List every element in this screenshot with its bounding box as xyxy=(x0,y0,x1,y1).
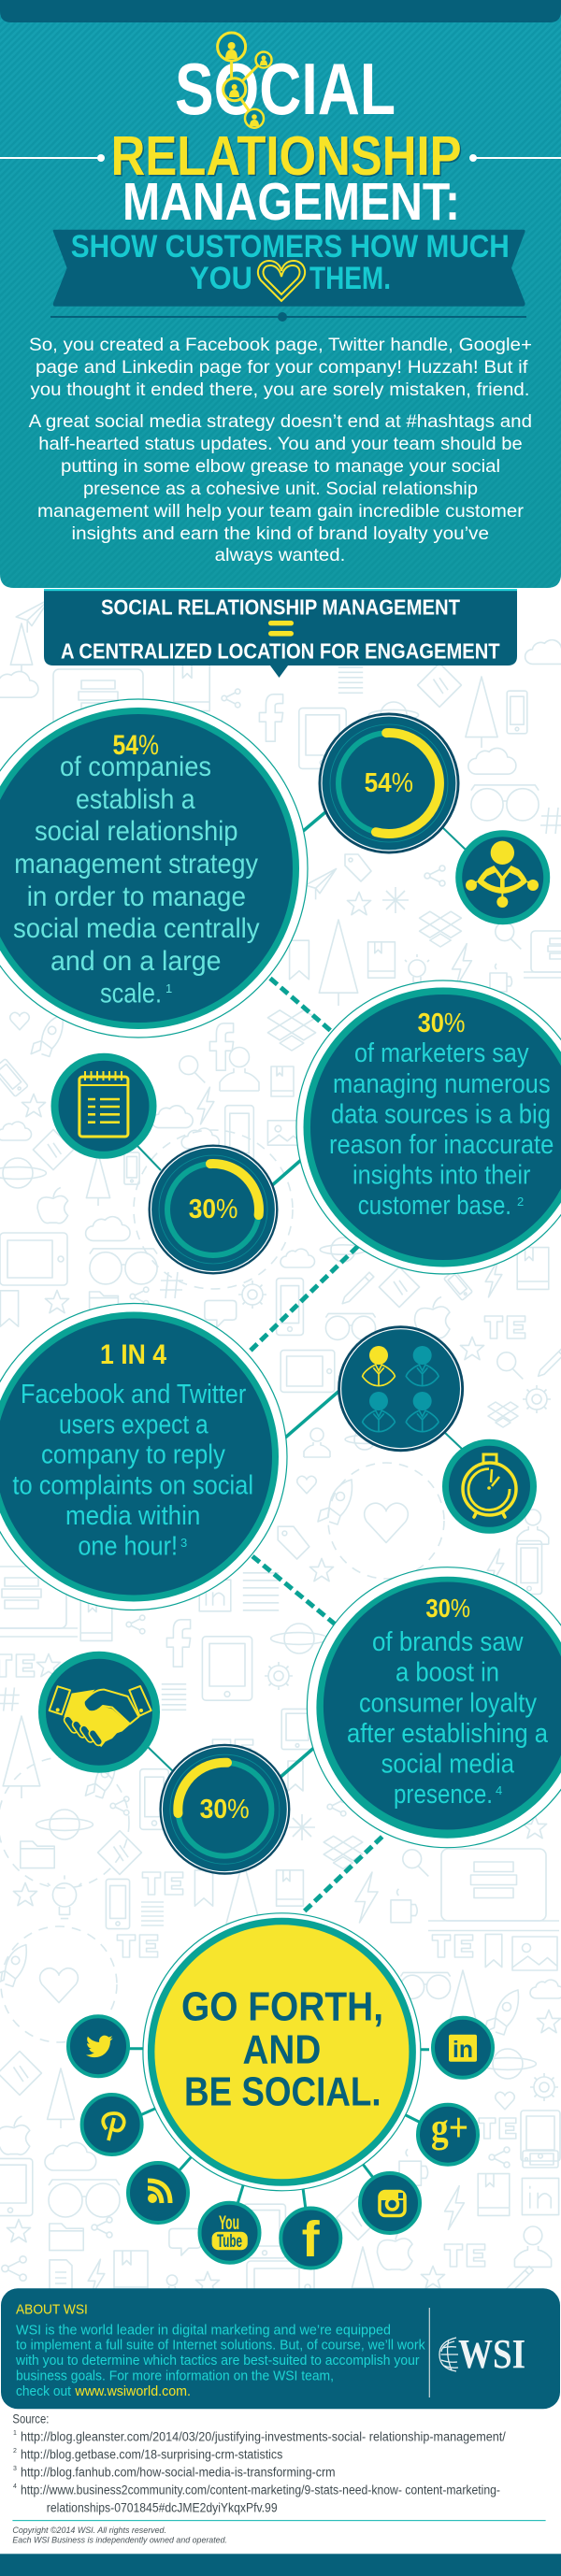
panel: closing call to action: GO FORTH, xyxy=(181,1984,383,2030)
text: intro paragraph two: insights and earn the kind of brand loyalty you’ve xyxy=(71,523,489,544)
panel: stat 54 percent: 54% xyxy=(112,730,159,761)
panel: closing call to action: AND xyxy=(243,2026,321,2072)
ribbon: subtitle xyxy=(53,229,525,307)
icon: notepad xyxy=(54,1057,153,1155)
chart: 54 percent dial xyxy=(318,712,460,854)
text: sources: relationships-0701845#dcJME2dyiYkqxPfv.99 xyxy=(47,2501,278,2515)
panel: header introduction xyxy=(0,0,561,588)
text: sources: http://blog.getbase.com/18-surprising-crm-statistics xyxy=(21,2448,283,2462)
connector: dial to stat four xyxy=(280,1746,316,1778)
logo: WSI: WSI xyxy=(458,2331,525,2377)
text: intro paragraph one: So, you created a Facebook page, Twitter handle, Google+ xyxy=(29,335,532,355)
panel: stat 30 percent of marketers: 2 xyxy=(517,1195,524,1209)
chart: 30 percent dial one: 30% xyxy=(189,1195,237,1224)
panel: stat 54 percent: social relationship xyxy=(35,816,237,847)
side rule left xyxy=(0,154,105,162)
icon: google plus: g+ xyxy=(431,2105,468,2151)
panel: stat 1 in 4: company to reply xyxy=(41,1440,226,1470)
panel: about WSI xyxy=(1,2288,560,2409)
connectors: social icons to closing circle xyxy=(127,2049,429,2210)
panel: stat 30 percent of brands: of brands saw xyxy=(372,1627,524,1657)
panel: stat 54 percent: in order to manage xyxy=(27,881,246,912)
connector: handshake to dial xyxy=(147,1746,174,1772)
dashed arrow: stat two to stat three xyxy=(249,1246,358,1352)
icon: google plus xyxy=(418,2105,478,2165)
text: sources: http://blog.fanhub.com/how-social-media-is-transforming-crm xyxy=(21,2466,336,2480)
panel: stat 30 percent of brands xyxy=(307,1567,561,1848)
panel: about WSI: with you to determine which tactics are best-suited to accomplish your xyxy=(15,2353,419,2368)
panel: stat 54 percent: establish a xyxy=(76,784,195,815)
connector: dial to icon xyxy=(441,826,467,851)
connector: stat three to dial xyxy=(284,1390,340,1438)
panel: stat 1 in 4: Facebook and Twitter xyxy=(21,1380,247,1410)
panel: about WSI: WSI is the world leader in digital marketing and we’re equipped xyxy=(16,2322,391,2338)
text: intro paragraph two: A great social media strategy doesn’t end at #hashtags and xyxy=(29,411,532,432)
panel: stat 30 percent of marketers: of marketers say xyxy=(354,1038,529,1068)
panel: stat 1 in 4: users expect a xyxy=(59,1410,209,1439)
icon: heart xyxy=(258,261,305,301)
panel: about WSI: www.wsiworld.com. xyxy=(74,2383,191,2399)
chart: 30 percent dial two: 30% xyxy=(200,1795,250,1825)
dashed arrow: stat four to closing circle xyxy=(304,1837,382,1911)
banner: centralized location: A CENTRALIZED LOCATION FOR ENGAGEMENT xyxy=(61,639,500,664)
icon: pinterest xyxy=(82,2095,142,2154)
text: sources: http://blog.gleanster.com/2014/03/20/justifying-investments-social- relationship-management/ xyxy=(21,2430,506,2444)
text: sources: 1 xyxy=(13,2430,17,2437)
icon: linkedin xyxy=(433,2018,493,2078)
text: intro paragraph two: management will help your team gain incredible customer xyxy=(37,501,525,522)
text: intro paragraph two: presence as a cohesive unit. Social relationship xyxy=(83,479,478,499)
icon: youtube: Tube xyxy=(217,2232,242,2252)
panel: stat 54 percent: 1 xyxy=(165,981,172,995)
chart: 30 percent dial two xyxy=(159,1744,290,1875)
panel: about WSI: business goals. For more information on the WSI team, xyxy=(16,2368,334,2384)
panel: stat 30 percent of brands: 4 xyxy=(496,1783,502,1797)
icon: facebook: f xyxy=(302,2211,321,2268)
chart: 30 percent dial one xyxy=(148,1144,279,1275)
panel: stat 1 in 4: media within xyxy=(65,1501,200,1531)
icon: linkedin: in xyxy=(453,2037,473,2063)
connector: dial to stat two xyxy=(271,1160,301,1186)
text: sources xyxy=(12,2412,506,2515)
text: intro paragraph two: half-hearted status updates. You and your team should be xyxy=(38,434,523,454)
icon: facebook xyxy=(280,2208,340,2268)
logo: WSI xyxy=(439,2331,525,2377)
icon: rss xyxy=(128,2163,188,2223)
icon: four people dial xyxy=(338,1325,464,1452)
panel: stat 30 percent of marketers xyxy=(296,980,561,1274)
panel: stat 30 percent of marketers: 30% xyxy=(418,1009,466,1038)
connector: stat one to dial xyxy=(301,812,325,833)
bottom bar xyxy=(0,2554,561,2576)
panel: about WSI: to implement a full suite of Internet solutions. But, of course, we’ll work xyxy=(16,2338,425,2354)
title: Relationship: RELATIONSHIP xyxy=(112,127,463,189)
icon: youtube: You xyxy=(219,2212,239,2234)
panel: stat 54 percent: and on a large xyxy=(50,946,221,977)
connector: dial to clock xyxy=(444,1432,463,1450)
panel: stat 54 percent: scale. xyxy=(100,979,162,1009)
panel: stat 30 percent of brands: 30% xyxy=(425,1594,470,1623)
icon: instagram xyxy=(360,2173,420,2233)
panel: closing call to action: BE SOCIAL. xyxy=(184,2069,381,2115)
text: intro paragraph two: putting in some elbow grease to manage your social xyxy=(61,456,500,477)
panel: stat 1 in 4: 3 xyxy=(180,1536,187,1550)
panel: about WSI: check out xyxy=(16,2383,72,2399)
text: sources: 2 xyxy=(13,2448,17,2454)
title: Social: SOCIAL xyxy=(175,48,396,130)
dashed arrow: stat one to stat two xyxy=(270,979,331,1031)
text: copyright xyxy=(12,2526,227,2546)
text: sources: 3 xyxy=(13,2466,17,2472)
icon: connected person xyxy=(459,834,547,922)
text: sources: 4 xyxy=(13,2483,17,2490)
text: sources: Source: xyxy=(12,2412,49,2426)
icon: equals sign xyxy=(268,621,294,637)
text: intro paragraph two xyxy=(29,411,532,565)
side rule right xyxy=(469,154,561,162)
ribbon: subtitle: SHOW CUSTOMERS HOW MUCH xyxy=(71,229,510,265)
panel: stat 30 percent of brands: consumer loyalty xyxy=(359,1689,538,1719)
title: Management: MANAGEMENT: xyxy=(122,172,460,232)
icon: youtube xyxy=(200,2203,260,2263)
panel: stat 54 percent: management strategy xyxy=(14,849,258,880)
icon: handshake xyxy=(42,1655,156,1769)
panel: stat 1 in 4 xyxy=(0,1303,287,1610)
panel: stat 1 in 4: 1 IN 4 xyxy=(100,1339,166,1370)
panel: stat 54 percent: of companies xyxy=(60,751,211,782)
ribbon: subtitle: THEM. xyxy=(309,261,391,296)
chart: 54 percent dial: 54% xyxy=(365,768,413,798)
connector: notepad to dial xyxy=(137,1146,161,1170)
panel: stat 54 percent xyxy=(0,699,308,1038)
icon: twitter xyxy=(68,2016,128,2076)
title: Relationship: RELATIONSHIP xyxy=(111,125,462,187)
panel: stat 1 in 4: one hour! xyxy=(78,1531,178,1561)
panel: stat 30 percent of brands: presence. xyxy=(394,1780,493,1810)
panel: stat 54 percent: social media centrally xyxy=(13,913,260,944)
panel: about WSI: ABOUT WSI xyxy=(16,2302,88,2318)
panel: stat 30 percent of brands: a boost in xyxy=(396,1657,499,1687)
text: copyright: Copyright ©2014 WSI. All rights reserved. xyxy=(12,2526,166,2536)
icon: clock xyxy=(445,1442,533,1530)
panel: stat 30 percent of marketers: customer base. xyxy=(358,1191,511,1221)
banner: centralized location: SOCIAL RELATIONSHIP MANAGEMENT xyxy=(101,594,460,619)
panel: stat 30 percent of brands: social media xyxy=(381,1750,514,1780)
dashed arrow: stat three to stat four xyxy=(252,1556,335,1624)
text: intro paragraph one: you thought it ended there, you are sorely mistaken, friend. xyxy=(30,379,529,400)
panel: stat 1 in 4: to complaints on social xyxy=(12,1470,253,1500)
text: intro paragraph two: always wanted. xyxy=(215,545,345,565)
text: intro paragraph one: page and Linkedin page for your company! Huzzah! But if xyxy=(36,357,528,378)
top bar xyxy=(0,0,561,22)
panel: closing call to action xyxy=(143,1913,421,2191)
banner: centralized location xyxy=(44,589,517,678)
text: copyright: Each WSI Business is independently owned and operated. xyxy=(12,2536,227,2546)
text: intro paragraph one xyxy=(29,335,532,400)
ribbon: subtitle: YOU xyxy=(190,261,252,296)
text: sources: http://www.business2community.com/content-marketing/9-stats-need-know- content-marketing- xyxy=(21,2483,500,2497)
panel: stat 30 percent of marketers: insights into their xyxy=(352,1161,531,1191)
icon: people network on the O xyxy=(218,33,271,128)
